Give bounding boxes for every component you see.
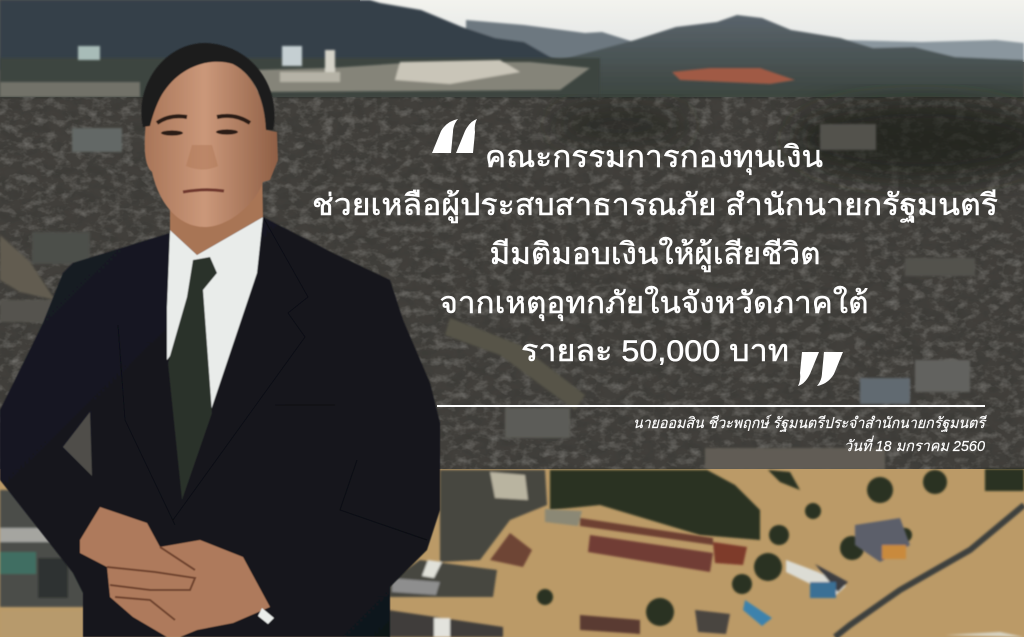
hair bbox=[141, 43, 275, 130]
dark tree mass top right bbox=[790, 100, 1024, 180]
quote text: มีมติมอบเงินให้ผู้เสียชีวิต bbox=[490, 237, 820, 272]
quote text: จากเหตุอุทกภัยในจังหวัดภาคใต้ bbox=[440, 286, 868, 322]
quote text: ช่วยเหลือผู้ประสบสาธารณภัย สำนักนายกรัฐมนตรี bbox=[312, 189, 998, 223]
left buildings bbox=[0, 490, 90, 637]
suit body bbox=[0, 217, 440, 637]
flood photo bbox=[0, 469, 1024, 637]
quote text bbox=[312, 141, 998, 368]
mountain range bbox=[0, 0, 1024, 98]
opening quotation mark bbox=[432, 119, 477, 153]
buildings and river bbox=[0, 124, 975, 470]
quote text: รายละ 50,000 บาท bbox=[521, 335, 789, 368]
city texture bbox=[0, 97, 1024, 470]
shirt bbox=[167, 217, 263, 413]
portrait of man in suit bbox=[0, 43, 440, 637]
nose and mouth bbox=[186, 145, 218, 170]
suit lapel lines bbox=[118, 217, 427, 540]
dark quote panel bbox=[0, 97, 1024, 469]
eyes and brows bbox=[157, 116, 250, 123]
head bbox=[145, 58, 278, 227]
quote text: คณะกรรมการกองทุนเงิน bbox=[485, 141, 823, 176]
shirt cuff bbox=[258, 608, 274, 624]
distant town bbox=[0, 46, 795, 97]
closing quotation mark bbox=[798, 352, 843, 386]
necktie bbox=[168, 257, 217, 500]
gap between arm and body bbox=[63, 412, 92, 476]
divider rule bbox=[437, 405, 985, 407]
neck bbox=[170, 160, 263, 255]
attribution: นายออมสิน ชีวะพฤกษ์ รัฐมนตรีประจำสำนักนายกรัฐมนตรี bbox=[633, 414, 987, 432]
flooded buildings bbox=[387, 470, 1024, 637]
trees bbox=[537, 469, 1024, 626]
clasped hands bbox=[80, 507, 270, 637]
attribution bbox=[633, 414, 987, 455]
sky bbox=[360, 0, 1024, 62]
attribution: วันที่ 18 มกราคม 2560 bbox=[844, 435, 986, 455]
flooded road bbox=[835, 505, 1024, 637]
